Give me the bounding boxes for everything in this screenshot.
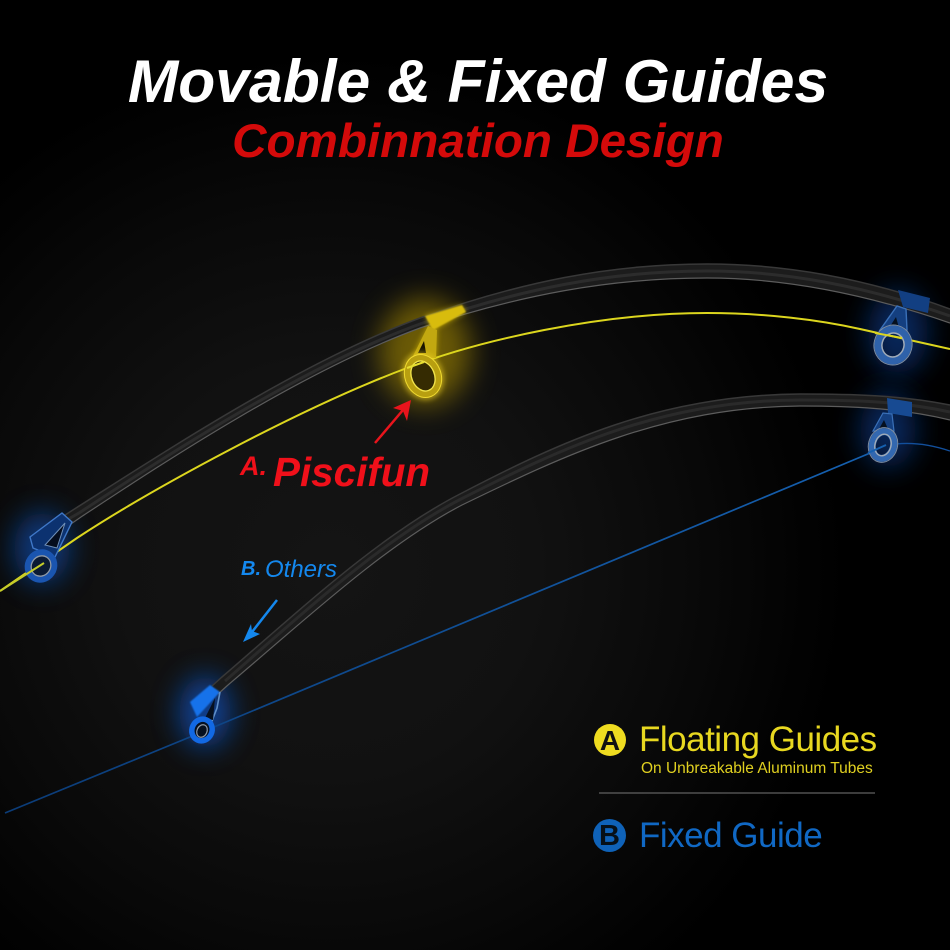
title: Movable & Fixed Guides [128, 47, 828, 115]
label: Others: Others [265, 556, 337, 583]
legend: Fixed Guide: Fixed Guide [639, 816, 822, 855]
guide: right A [869, 290, 930, 369]
guide: lower left B [188, 685, 220, 744]
label: Piscifun: Piscifun [273, 449, 430, 495]
legend badge B: B [599, 820, 620, 852]
glow: guide lower left B [179, 676, 231, 748]
fishing line A [0, 313, 950, 591]
glow: guide right B [860, 392, 916, 468]
rod B [212, 394, 950, 694]
rod A [62, 264, 950, 526]
divider [599, 792, 875, 794]
legend: Floating Guides: Floating Guides [639, 720, 877, 759]
glow: guide lower left A [14, 512, 70, 584]
arrow: blue to others guide [243, 600, 277, 642]
legend: On Unbreakable Aluminum Tubes: On Unbreakable Aluminum Tubes [641, 760, 873, 777]
fishing line B [5, 443, 950, 813]
glow: guide right A [868, 290, 928, 374]
subtitle: Combinnation Design [232, 115, 724, 168]
arrow: red to Piscifun guide [375, 400, 411, 443]
label: A.: A. [240, 451, 267, 481]
guide: Piscifun floating guide [398, 305, 466, 403]
legend badge B [593, 819, 626, 852]
glow: Piscifun guide [379, 298, 471, 406]
legend badge A [594, 724, 626, 756]
label: B.: B. [241, 558, 261, 580]
guide: right B [864, 398, 912, 466]
guide: lower left A [0, 513, 72, 591]
legend badge A: A [600, 725, 620, 756]
